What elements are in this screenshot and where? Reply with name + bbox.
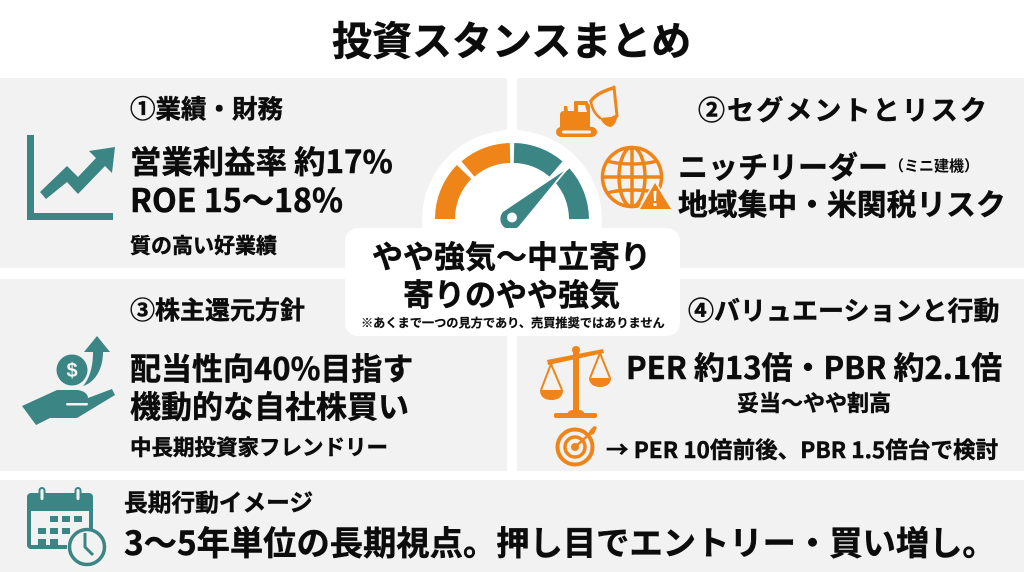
- text: ROE: ROE 15〜18%: [130, 176, 343, 222]
- text: ニッチリーダー: ニッチリーダー: [678, 143, 888, 187]
- text: 質の高い好業績: 質の高い好業績: [130, 230, 277, 260]
- heading: 長期行動イメージ: 長期行動イメージ: [124, 484, 313, 518]
- icon: globe with warning: [600, 146, 671, 209]
- heading: バリュエーションと行動: ④バリュエーションと行動: [688, 291, 999, 328]
- panel: バリュエーションと行動: [517, 279, 1024, 471]
- heading: 業績・財務: ①業績・財務: [130, 89, 283, 126]
- center label card: [345, 228, 680, 336]
- text: 機動的な自社株買い: 機動的な自社株買い: [130, 382, 409, 427]
- disclaimer: ※あくまで一つの見方であり、売買推奨ではありません: [361, 313, 665, 331]
- heading: セグメントとリスク: ②セグメントとリスク: [698, 89, 989, 128]
- text: PER PBR: PER 約13倍・PBR 約2.1倍: [626, 343, 1002, 388]
- title: 投資スタンスまとめ: [332, 9, 691, 67]
- text: 地域集中・米関税リスク: 地域集中・米関税リスク: [678, 180, 1006, 224]
- text: ミニ建機: （ミニ建機）: [889, 155, 979, 176]
- center line 1: やや強気〜中立寄り: [372, 232, 651, 277]
- heading: 株主還元方針: ③株主還元方針: [130, 291, 305, 327]
- gauge dial: [422, 130, 602, 228]
- icon: hand with coin: [22, 336, 115, 425]
- text: 妥当〜やや割高: 妥当〜やや割高: [737, 386, 891, 418]
- text: 営業利益率: 営業利益率 約17%: [130, 138, 393, 183]
- center gauge group: [345, 130, 680, 336]
- panel: 株主還元方針: [0, 279, 507, 471]
- text: 配当性向: 配当性向40%目指す: [130, 344, 413, 389]
- text: 中長期投資家フレンドリー: 中長期投資家フレンドリー: [130, 431, 388, 462]
- text: 検討水準: → PER 10倍前後、PBR 1.5倍台で検討: [606, 432, 998, 465]
- icon: calendar with clock: [27, 487, 106, 566]
- panel: 業績・財務: [0, 78, 507, 268]
- panel: セグメントとリスク: [517, 78, 1024, 268]
- text: $: [66, 360, 78, 382]
- icon: growth chart: [27, 135, 115, 220]
- text: 長期視点: 3〜5年単位の長期視点。押し目でエントリー・買い増し。: [124, 516, 996, 565]
- icon: excavator: [556, 86, 618, 137]
- icon: target: [556, 426, 597, 466]
- center line 2: 寄りのやや強気: [403, 270, 620, 315]
- icon: balance scale: [540, 346, 611, 418]
- panel: 長期行動イメージ: [0, 480, 1024, 572]
